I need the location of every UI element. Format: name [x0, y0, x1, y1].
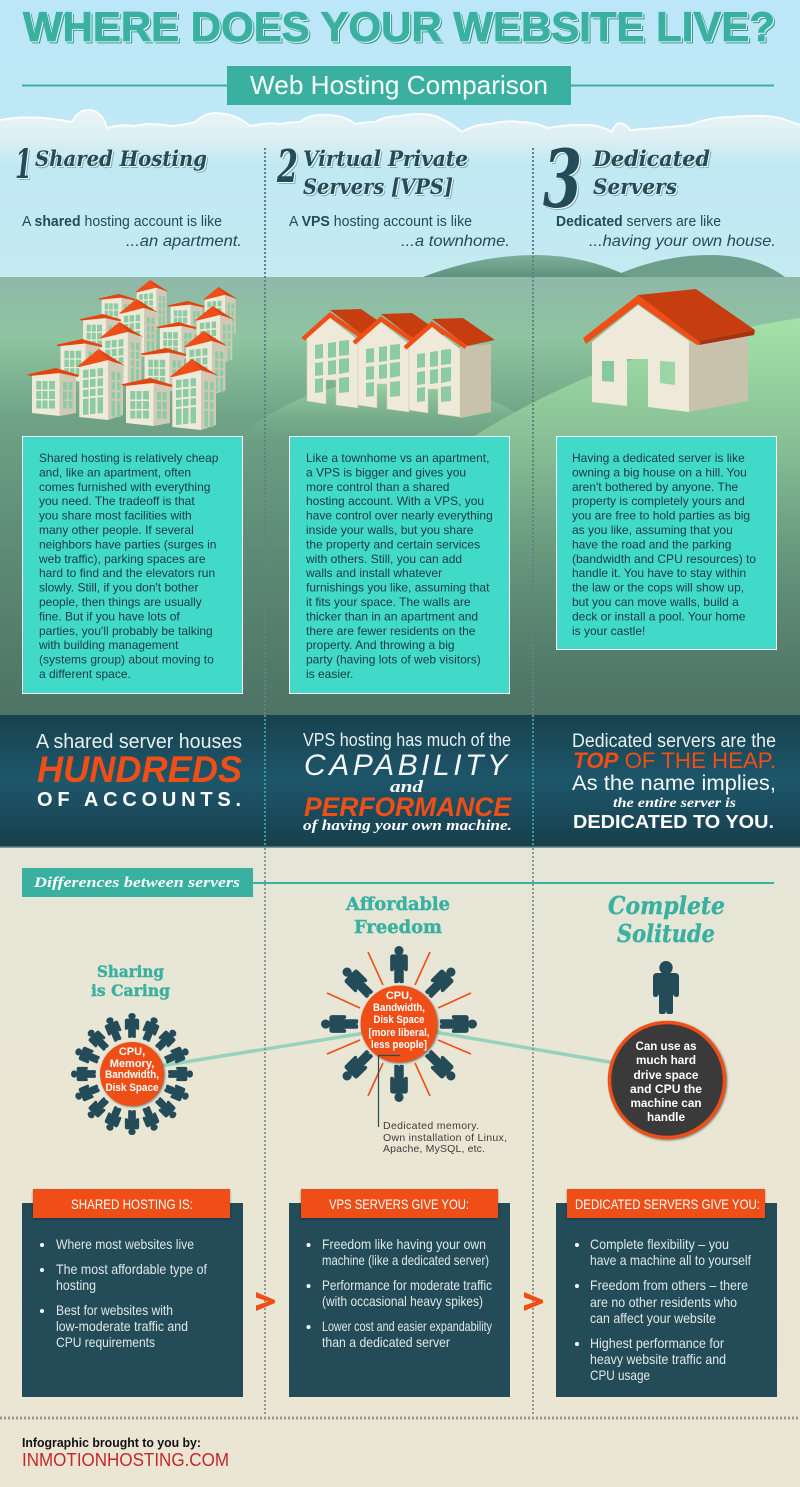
panel: vps text: inside your walls, but you share [306, 523, 474, 537]
callout: dedicated memory: Apache, MySQL, etc. [383, 1143, 485, 1155]
panel: vps text: a VPS is bigger and gives you [306, 465, 466, 479]
panel: shared hosting is: CPU requirements [56, 1334, 155, 1350]
panel: vps servers give you: Performance for moderate traffic [322, 1277, 492, 1293]
panel: dedicated text: deck or install a pool. Your home [572, 609, 746, 623]
statement: vps: of having your own machine. [303, 818, 512, 834]
column 1 heading [15, 141, 207, 188]
panel: shared text: fine. But if you have lots of [39, 609, 180, 623]
heading: affordable freedom: Freedom [354, 918, 442, 938]
sky background [0, 0, 800, 278]
statement: shared: HUNDREDS [37, 749, 242, 790]
column 2 heading: Servers [VPS] [303, 174, 453, 199]
analogy text: dedicated: ...having your own house. [589, 233, 776, 250]
panel: dedicated text [556, 436, 776, 650]
panel: vps text: with others. Still, you can add [305, 552, 462, 566]
panel: shared text: neighbors have parties (surges in [39, 537, 216, 551]
footer credit: Infographic brought to you by: [22, 1435, 201, 1450]
cream lower background [0, 847, 800, 1487]
column 1 heading: Shared Hosting [35, 146, 207, 171]
green landscape [0, 277, 800, 716]
panel: dedicated text: (bandwidth and CPU resources) to [572, 552, 756, 566]
panel: shared text: you share most facilities with [39, 509, 192, 523]
analogy text: dedicated: Dedicated servers are like [556, 213, 721, 230]
statement: vps [303, 730, 512, 834]
statement: dedicated [572, 731, 776, 832]
callout: dedicated memory: Dedicated memory. [383, 1120, 479, 1132]
panel: shared hosting is: low-moderate traffic and [56, 1318, 188, 1334]
panel: dedicated servers give you: have a machine all to yourself [590, 1252, 751, 1268]
panel: dedicated text: you are free to hold parties as big [572, 509, 750, 523]
analogy text: dedicated [556, 213, 776, 250]
heading: complete solitude [608, 891, 725, 948]
panel: vps servers give you: than a dedicated server [322, 1334, 450, 1350]
panel: dedicated servers give you: CPU usage [590, 1367, 650, 1383]
statement: dedicated: DEDICATED TO YOU. [573, 812, 774, 832]
panel: vps text: party (having lots of web visitors) [306, 653, 481, 667]
panel: shared text: a different space. [39, 667, 131, 681]
panel: vps servers give you: (with occasional heavy spikes) [322, 1293, 483, 1309]
diagram: shared server with many users [71, 1013, 193, 1135]
panel: dedicated text: owning a big house on a hill. You [572, 465, 747, 479]
statement: dedicated: Dedicated servers are the [572, 731, 776, 752]
panel: vps text [290, 436, 510, 694]
panel: vps text: it fits your space. The walls are [306, 595, 471, 609]
panel: vps text: more control than a shared [306, 480, 449, 494]
panel: shared text: people, then things are usually [39, 595, 202, 609]
illustration: apartment towers [27, 280, 237, 430]
statement: shared: OF ACCOUNTS. [37, 789, 241, 811]
panel: dedicated text: as you like, assuming that you [572, 523, 733, 537]
statement: vps: CAPABILITY [304, 749, 509, 782]
panel: shared hosting is: Best for websites with [56, 1302, 173, 1318]
callout: dedicated memory: Own installation of Linux, [383, 1132, 507, 1144]
column 2 heading: Virtual Private [303, 146, 468, 171]
panel: vps text: property. And throwing a big [306, 638, 455, 652]
column 3 heading: 3 [543, 132, 582, 226]
dark statement band [0, 715, 800, 847]
panel: shared text: (systems group) about moving to [39, 653, 214, 667]
panel: vps text: thicker than in an apartment and [306, 609, 478, 623]
panel: shared text: with building management [38, 638, 179, 652]
panel: dedicated text: is your castle! [572, 624, 645, 638]
panel: dedicated servers give you [556, 1189, 777, 1397]
panel: dedicated text: the law or the cops will show up, [572, 581, 744, 595]
statement: dedicated: the entire server is [613, 795, 736, 810]
arrow: dedicated greater than vps [524, 1292, 543, 1311]
diagram: vps server with fewer users: CPU, [386, 990, 412, 1002]
panel: shared text: parties, you'll probably be talking [39, 624, 213, 638]
connector line between circles [160, 1032, 615, 1066]
arrow: vps greater than shared [256, 1292, 275, 1311]
subtitle banner: Web Hosting Comparison [250, 70, 548, 100]
panel: shared text: and, like an apartment, often [39, 465, 191, 479]
section label: differences: Differences between servers [33, 875, 240, 891]
panel: shared text: slowly. Still, if you don't bother [39, 581, 198, 595]
panel: vps servers give you: VPS SERVERS GIVE YOU: [329, 1196, 469, 1212]
panel: shared hosting is: Where most websites live [56, 1236, 194, 1252]
panel: vps servers give you: machine (like a dedicated server) [322, 1252, 489, 1268]
analogy text: vps: A VPS hosting account is like [289, 213, 472, 230]
statement: dedicated: As the name implies, [572, 772, 776, 795]
heading: affordable freedom [345, 895, 450, 938]
heading: affordable freedom: Affordable [345, 895, 450, 915]
panel: dedicated text: Having a dedicated server is like [572, 451, 745, 465]
diagram: dedicated server with one user: drive space [634, 1068, 699, 1082]
panel: dedicated servers give you: Freedom from others – there [590, 1277, 748, 1293]
diagram: dedicated server with one user [610, 961, 724, 1138]
panel: vps text: the property and certain services [306, 537, 480, 551]
panel: shared hosting is: The most affordable type of [56, 1261, 207, 1277]
diagram: shared server with many users: Disk Space [106, 1082, 158, 1094]
statement: vps: VPS hosting has much of the [303, 730, 511, 750]
panel: dedicated servers give you: are no other residents who [590, 1294, 737, 1310]
footer credit [22, 1435, 229, 1470]
panel: dedicated servers give you: DEDICATED SERVERS GIVE YOU: [575, 1196, 760, 1212]
rolling hills [240, 318, 800, 716]
statement: dedicated: TOP OF THE HEAP. [573, 748, 776, 773]
panel: dedicated text: but you can move walls, build a [572, 595, 739, 609]
panel: dedicated servers give you: Highest performance for [590, 1335, 724, 1351]
panel: shared text [22, 436, 242, 694]
panel: vps servers give you: Lower cost and easier expandability [322, 1318, 492, 1334]
panel: dedicated servers give you: heavy website traffic and [590, 1351, 726, 1367]
section label: differences [22, 868, 774, 897]
diagram: vps server with fewer users: less people] [371, 1039, 427, 1051]
panel: shared hosting is [22, 1189, 243, 1397]
heading: sharing is caring: Sharing [97, 962, 164, 981]
statement: shared [36, 731, 242, 811]
subtitle banner [22, 66, 774, 105]
panel: vps text: hosting account. With a VPS, you [306, 494, 484, 508]
panel: dedicated servers give you: Complete flexibility – you [590, 1236, 729, 1252]
panel: shared text: you need. The tradeoff is that [39, 494, 195, 508]
statement: vps: PERFORMANCE [304, 792, 512, 822]
clouds [0, 110, 800, 163]
diagram: dedicated server with one user: handle [647, 1110, 685, 1124]
diagram: dedicated server with one user: machine can [630, 1096, 702, 1110]
panel: vps text: Like a townhome vs an apartment, [306, 451, 489, 465]
panel: vps text: there are fewer residents on the [306, 624, 476, 638]
column 3 heading [543, 132, 710, 226]
diagram: shared server with many users: CPU, [119, 1046, 145, 1058]
analogy text: vps [289, 213, 510, 250]
panel: vps text: furnishings you like, assuming that [306, 581, 490, 595]
diagram: vps server with fewer users: [more liberal, [368, 1027, 430, 1039]
heading: sharing is caring: is Caring [91, 981, 170, 1000]
diagram: dedicated server with one user: and CPU the [630, 1082, 702, 1096]
heading: sharing is caring [91, 962, 170, 1000]
panel: shared hosting is: SHARED HOSTING IS: [71, 1196, 193, 1212]
panel: shared text: Shared hosting is relatively cheap [39, 451, 219, 465]
analogy text: vps: ...a townhome. [401, 233, 510, 250]
column 3 heading: Servers [593, 174, 677, 199]
title: WHERE DOES YOUR WEBSITE LIVE? [23, 3, 775, 50]
panel: dedicated text: handle it. You have to stay within [572, 566, 746, 580]
panel: dedicated servers give you: can affect your website [590, 1310, 716, 1326]
panel: shared text: hard to find and the elevators run [39, 566, 215, 580]
panel: dedicated text: aren't bothered by anyone. The [572, 480, 739, 494]
diagram: dedicated server with one user: Can use as [636, 1039, 697, 1053]
diagram: vps server with fewer users [321, 946, 477, 1102]
panel: vps text: have control over nearly everything [306, 509, 493, 523]
diagram: shared server with many users: Bandwidth, [105, 1069, 159, 1081]
statement: vps: and [390, 777, 424, 796]
panel: shared text: many other people. If several [39, 523, 194, 537]
analogy text: shared: A shared hosting account is like [22, 213, 222, 230]
diagram: dedicated server with one user: much hard [636, 1053, 696, 1067]
panel: vps text: is easier. [306, 667, 353, 681]
panel: shared hosting is: hosting [56, 1277, 96, 1293]
column 2 heading [276, 140, 468, 199]
illustration: townhomes [303, 309, 495, 418]
diagram: vps server with fewer users: Bandwidth, [373, 1002, 425, 1014]
heading: complete solitude: Solitude [617, 919, 715, 948]
panel: shared text: comes furnished with everything [39, 480, 210, 494]
illustration: dedicated house [583, 289, 755, 412]
panel: dedicated text: have the road and the parking [572, 537, 731, 551]
column 2 heading: 2 [276, 140, 298, 193]
hills on the horizon [423, 255, 785, 277]
statement: shared: A shared server houses [36, 731, 242, 753]
heading: complete solitude: Complete [608, 891, 725, 920]
analogy text: shared: ...an apartment. [126, 233, 242, 250]
panel: vps servers give you: Freedom like having your own [322, 1236, 486, 1252]
panel: dedicated text: property is completely yours and [572, 494, 745, 508]
footer credit: INMOTIONHOSTING.COM [22, 1450, 229, 1470]
column 1 heading: 1 [15, 141, 32, 188]
panel: vps text: walls and install whatever [305, 566, 442, 580]
panel: shared text: web traffic), parking spaces are [38, 552, 206, 566]
column 3 heading: Dedicated [592, 146, 710, 171]
diagram: shared server with many users: Memory, [110, 1058, 154, 1070]
analogy text: shared [22, 213, 242, 250]
panel: vps servers give you [289, 1189, 510, 1397]
callout: dedicated memory [378, 1056, 507, 1155]
diagram: vps server with fewer users: Disk Space [374, 1014, 424, 1026]
